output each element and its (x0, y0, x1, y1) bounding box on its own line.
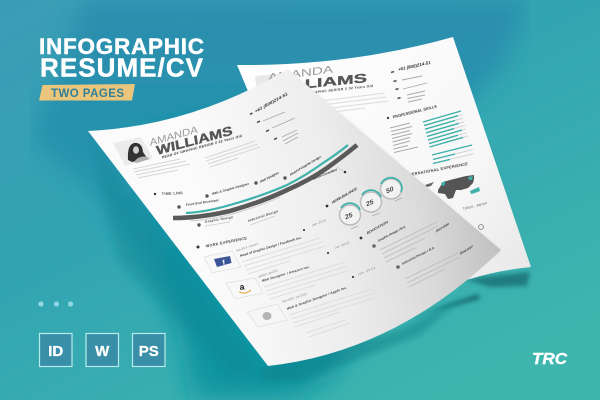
timeline labels (177, 155, 346, 227)
international experience heading: INTERNATIONAL EXPERIENCE (404, 161, 469, 178)
timeline labels: Front-End Developer (186, 198, 220, 207)
back page intro text lines (305, 93, 388, 115)
logo: amazon (226, 278, 263, 299)
shadows beneath pages (90, 140, 530, 382)
timeline labels: Industrial Design (248, 209, 278, 223)
timeline labels: Web Designer (260, 170, 280, 184)
logo: amazon: a (239, 281, 245, 292)
software badge: PS (132, 334, 165, 366)
back page contact (391, 60, 431, 102)
work balance donut charts (340, 178, 402, 229)
work experience entries: Feb 2008 - Jun 2010 (282, 292, 307, 304)
logo: facebook: f (222, 259, 226, 267)
work balance donut charts: 25 (345, 212, 353, 221)
work experience entries: Feb 2013 - Present (236, 242, 258, 253)
back page name (268, 64, 373, 97)
education entries: 2004-2007 (460, 244, 473, 256)
timeline labels: Head of Graphic Design (290, 155, 321, 177)
timeline dates: Jan 2010 (312, 218, 326, 227)
back page contact: +61 (800)214-51 (398, 60, 431, 72)
education entries (372, 222, 473, 287)
education entries: 2007-2009 (436, 222, 449, 233)
software badge: W: W (95, 343, 110, 360)
contact (250, 91, 298, 144)
education heading: EDUCATION (367, 219, 388, 235)
timeline labels: Web & Graphic Designer (212, 182, 250, 196)
software badge: PS: PS (139, 343, 159, 360)
photo (113, 137, 153, 166)
intro text lines (133, 141, 260, 178)
work experience entries: Head of Graphic Design / Facebook Inc. (240, 235, 302, 258)
contact: +61 (800)214-51 (255, 91, 288, 115)
work experience heading: WORK EXPERIENCE (205, 236, 248, 248)
timeline dates (303, 218, 375, 278)
title (39, 34, 204, 82)
work balance donut charts: 50 (386, 186, 394, 195)
logo: facebook (204, 251, 241, 273)
software badge: ID (40, 334, 72, 366)
back page (237, 37, 531, 310)
back page photo (255, 73, 290, 100)
name: HEAD OF GRAPHIC DESIGN // 32 Years Old (162, 134, 242, 159)
map caption: Tokyo, Japan (463, 201, 487, 211)
skill bars (423, 111, 474, 164)
world map (425, 175, 480, 199)
decorative dots (38, 301, 73, 307)
name (149, 123, 242, 159)
tag: two pages: TWO PAGES (51, 88, 124, 100)
work experience entries (236, 235, 378, 337)
back page small icon (479, 225, 483, 229)
logo: TRC: TRC (532, 351, 567, 368)
education entries: Industrial Design / B.A. (402, 245, 435, 266)
tag: two pages (39, 84, 135, 100)
timeline labels: Graphic Design (205, 215, 233, 224)
shadow of front page onto back page (292, 75, 500, 258)
title: RESUME/CV (40, 52, 204, 82)
logo: apple (247, 304, 287, 327)
work balance heading: WORK BALANCE (332, 186, 357, 205)
work experience entries: Jul 2010 - Jan 2013 (258, 268, 278, 279)
software badge: W (86, 334, 118, 366)
name: WILLIAMS (155, 123, 234, 158)
work experience entries: Web Designer / Amazon Inc. (262, 265, 310, 283)
software badge: ID: ID (48, 343, 63, 360)
education heading (360, 219, 388, 239)
front page (88, 69, 501, 366)
timeline heading: TIME LINE (161, 191, 184, 196)
name: AMANDA (149, 125, 199, 149)
back page name: AMANDA (268, 64, 333, 84)
timeline labels: Senior Consultant (313, 167, 338, 181)
timeline dates: Jun 2010 (335, 240, 349, 250)
education entries: Graphic Design / B.A. (378, 224, 406, 243)
work balance donut charts: 25 (366, 199, 374, 208)
title: INFOGRAPHIC (39, 34, 204, 59)
timeline dates: Jan 2012 (358, 266, 375, 276)
work experience entries: Web & Graphic Designer / Apple Inc. (287, 285, 347, 311)
back page name: WILLIAMS (268, 71, 367, 95)
back page name: HEAD OF GRAPHIC DESIGN // 32 Years Old (290, 84, 373, 97)
timeline curved band (173, 145, 357, 221)
professional skills heading: PROFESSIONAL SKILLS (392, 104, 438, 119)
skill labels (390, 123, 418, 152)
